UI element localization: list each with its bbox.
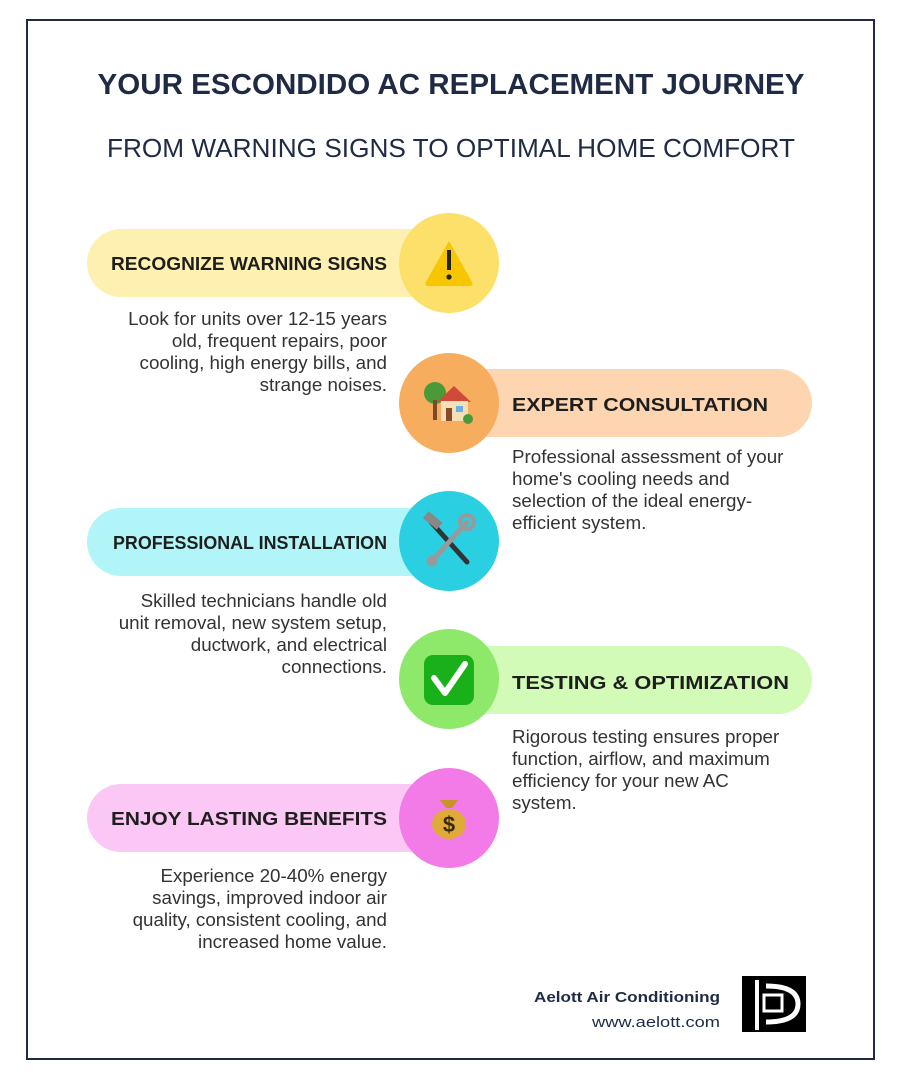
step 5: enjoy lasting benefits: quality, consistent cooling, and (133, 909, 387, 930)
step 4: testing & optimization: Rigorous testing ensures proper (512, 726, 779, 747)
icon: money bag (432, 800, 466, 839)
step 4: testing & optimization: system. (512, 792, 577, 813)
step 2: expert consultation: Professional assessment of your (512, 446, 783, 467)
step 2: expert consultation: EXPERT CONSULTATION (512, 395, 768, 415)
step 3: professional installation: ductwork, and electrical (191, 634, 387, 655)
step 3: professional installation: unit removal, new system setup, (119, 612, 387, 633)
step 2: expert consultation (399, 353, 812, 533)
step 1: recognize warning signs: Look for units over 12-15 years (128, 308, 387, 329)
step 5: enjoy lasting benefits: ENJOY LASTING BENEFITS (111, 809, 387, 829)
icon: tools (423, 511, 474, 565)
logo (742, 976, 806, 1032)
step 4: testing & optimization: TESTING & OPTIMIZATION (512, 673, 789, 693)
step 4: testing & optimization: efficiency for your new AC (512, 770, 729, 791)
footer: company: Aelott Air Conditioning (534, 989, 720, 1006)
icon: money bag: $ (443, 812, 455, 837)
step 5: enjoy lasting benefits: increased home value. (198, 931, 387, 952)
step 5: enjoy lasting benefits: savings, improved indoor air (152, 887, 387, 908)
step 1: recognize warning signs (87, 213, 499, 395)
icon: house (424, 382, 473, 424)
step 5: enjoy lasting benefits (87, 768, 499, 952)
footer: company (534, 989, 720, 1031)
step 1: recognize warning signs: RECOGNIZE WARNING SIGNS (111, 254, 387, 274)
step 2: expert consultation: efficient system. (512, 512, 646, 533)
step 3: professional installation: connections. (282, 656, 387, 677)
title: YOUR ESCONDIDO AC REPLACEMENT JOURNEY (98, 69, 805, 101)
icon: warning (425, 241, 473, 286)
subtitle: FROM WARNING SIGNS TO OPTIMAL HOME COMFORT (107, 133, 795, 163)
step 1: recognize warning signs: cooling, high energy bills, and (140, 352, 387, 373)
step 4: testing & optimization: function, airflow, and maximum (512, 748, 770, 769)
icon: check (424, 655, 474, 705)
step 1: recognize warning signs: strange noises. (260, 374, 387, 395)
footer: company: www.aelott.com (591, 1014, 720, 1031)
step 3: professional installation: PROFESSIONAL INSTALLATION (113, 533, 387, 553)
step 1: recognize warning signs: old, frequent repairs, poor (172, 330, 387, 351)
step 5: enjoy lasting benefits: Experience 20-40% energy (160, 865, 388, 886)
step 2: expert consultation: home's cooling needs and (512, 468, 730, 489)
step 3: professional installation: Skilled technicians handle old (141, 590, 387, 611)
step 2: expert consultation: selection of the ideal energy- (512, 490, 752, 511)
step 4: testing & optimization (399, 629, 812, 813)
step 3: professional installation (87, 491, 499, 677)
